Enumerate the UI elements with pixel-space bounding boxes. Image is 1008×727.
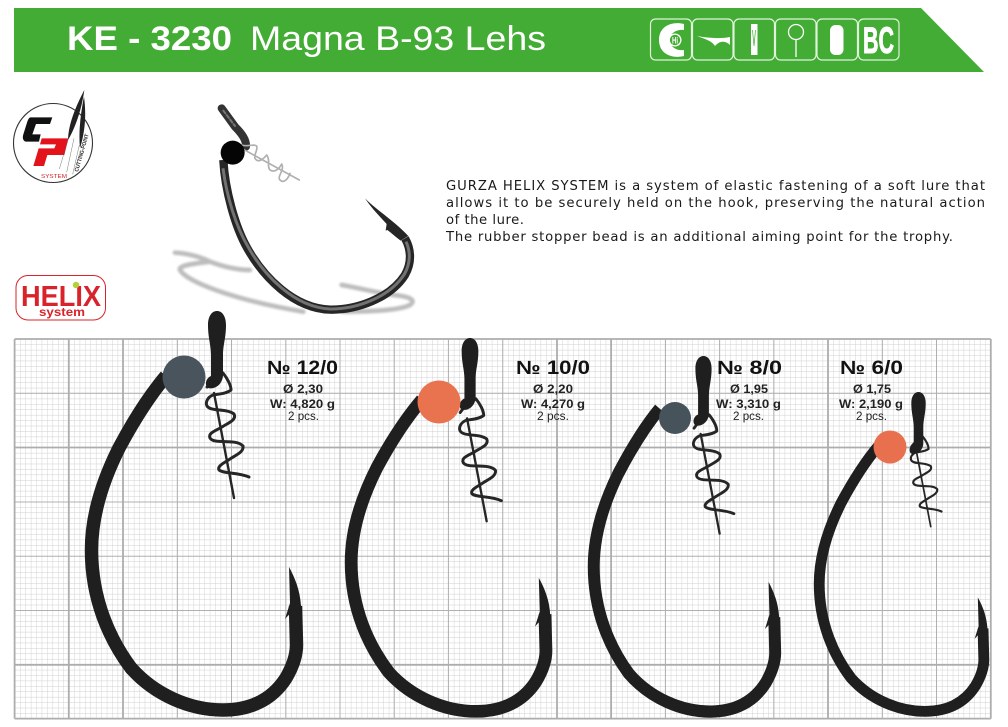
title: model name: Magna B-93 Lehs [250, 20, 546, 58]
spec: size 10/0 [516, 358, 590, 423]
hook 12/0 [92, 311, 302, 710]
graph paper panel [15, 339, 991, 719]
spec: size 8/0: № 8/0 [717, 358, 782, 379]
logo: CP system [14, 90, 92, 182]
hook 10/0 [351, 338, 551, 711]
spec: size 12/0: W: 4,820 g [270, 397, 335, 411]
logo text: system: SYSTEM [41, 174, 67, 180]
spec: size 10/0: Ø 2,20 [533, 382, 573, 396]
icon: pill [830, 25, 844, 55]
hook eye [222, 108, 246, 147]
title banner [14, 8, 984, 72]
spec: size 12/0: № 12/0 [267, 358, 338, 379]
hook 8/0 [594, 356, 780, 712]
bead 10/0 [418, 380, 460, 424]
logo: Helix system [16, 276, 106, 320]
spec: size 8/0: W: 3,310 g [716, 397, 781, 411]
icon: point profile [697, 36, 730, 46]
spec: size 10/0: № 10/0 [516, 358, 590, 379]
hook shadow [175, 253, 413, 312]
spec: size 6/0: 2 pcs. [856, 411, 887, 423]
spec: size 8/0 [716, 358, 782, 423]
spec: size 6/0: Ø 1,75 [853, 382, 891, 396]
icon: ring eye [788, 24, 804, 57]
spec: size 10/0: W: 4,270 g [521, 397, 585, 411]
spec: size 8/0: 2 pcs. [733, 411, 764, 423]
spec: size 8/0: Ø 1,95 [730, 382, 768, 396]
spec: size 12/0 [267, 358, 338, 423]
stopper bead [221, 141, 245, 165]
icon: C hook gap: Hi [672, 36, 678, 46]
spring [242, 145, 299, 181]
icon row [650, 19, 899, 61]
spec: size 12/0: Ø 2,30 [283, 382, 323, 396]
icon: C hook gap [659, 23, 684, 57]
spec: size 12/0: 2 pcs. [288, 411, 319, 423]
bead 8/0 [659, 402, 691, 434]
spec: size 10/0: 2 pcs. [537, 411, 569, 423]
description text [445, 179, 985, 245]
description text: allows it to be securely held on the hook, preserving the natural action [446, 196, 985, 211]
description text: The rubber stopper bead is an additional aiming point for the trophy. [445, 230, 953, 245]
logo text: system: system [39, 305, 85, 319]
spec: size 6/0: № 6/0 [840, 358, 903, 379]
bead 12/0 [162, 356, 206, 398]
logo text: cutting point: CUTTING-POINT [74, 133, 91, 173]
hook 6/0 [819, 392, 988, 711]
product photo hook [175, 108, 413, 312]
title: model code: KE - 3230 [67, 20, 232, 58]
description text: of the lure. [446, 213, 524, 228]
spec: size 6/0: W: 2,190 g [839, 397, 903, 411]
icon: wire section [751, 24, 758, 55]
icon: BC coating: BC [863, 20, 894, 61]
bead 6/0 [874, 430, 906, 464]
logo text: helix: HELIX [21, 281, 102, 313]
spec: size 6/0 [839, 358, 903, 423]
description text: GURZA HELIX SYSTEM is a system of elastic fastening of a soft lure that [446, 179, 985, 194]
hook body [223, 160, 410, 310]
